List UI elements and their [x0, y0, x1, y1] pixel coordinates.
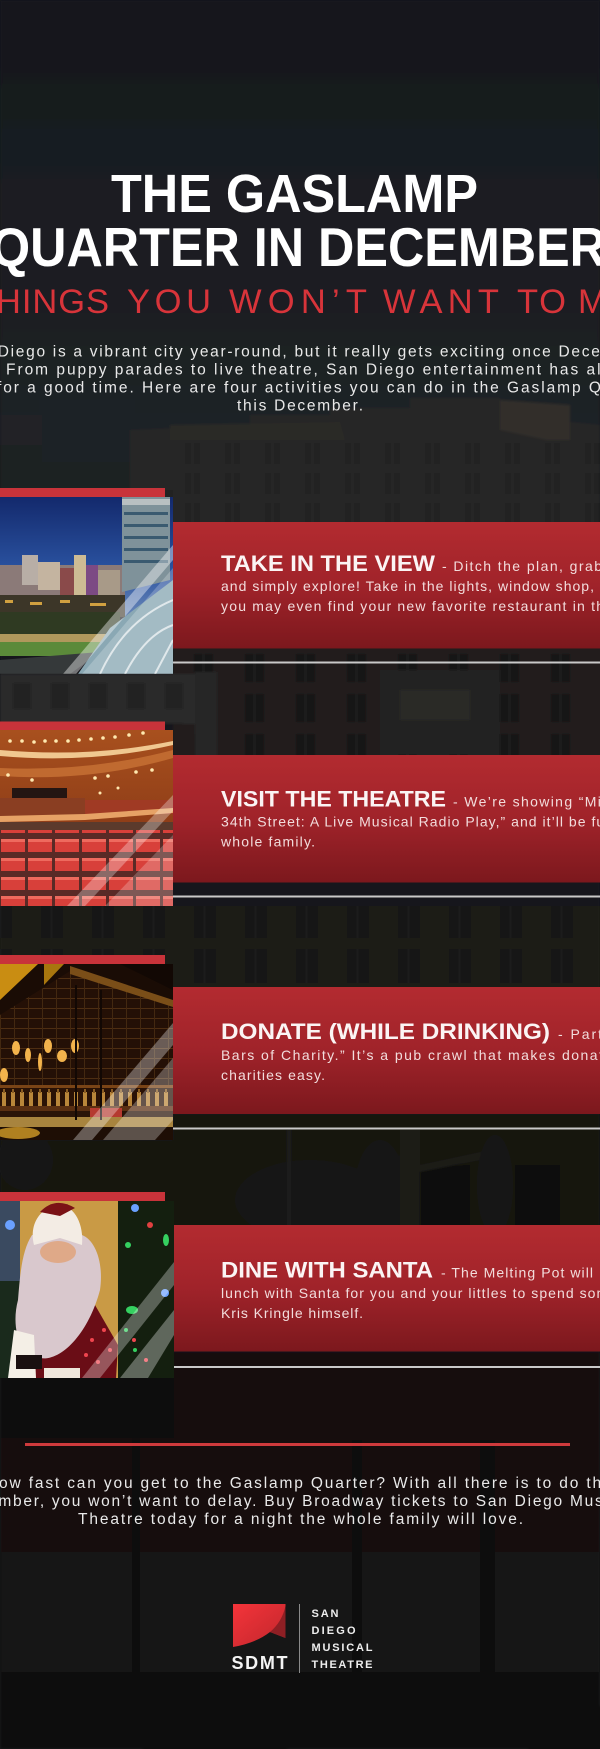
logo name: THEATRE [312, 1659, 372, 1671]
photo: theatre auditorium [0, 730, 173, 906]
description [220, 794, 600, 850]
red accent bar [0, 955, 165, 964]
logo name [312, 1608, 373, 1671]
rule [173, 896, 600, 898]
text band [173, 755, 600, 882]
icon: logo mark [233, 1604, 286, 1647]
item 3: donate while drinking [0, 955, 600, 1140]
photo: bar interior [0, 964, 173, 1140]
logo name: SAN [312, 1608, 339, 1620]
description: charities easy. [221, 1067, 325, 1083]
heading: VISIT THE THEATRE [221, 786, 446, 812]
red accent bar [0, 1192, 165, 1201]
intro paragraph [0, 344, 600, 414]
title [0, 164, 600, 278]
intro paragraph: From puppy parades to live theatre, San Diego entertainment has all [6, 362, 600, 378]
description: and simply explore! Take in the lights, window shop, [221, 578, 594, 594]
description: whole family. [220, 834, 315, 850]
logo: SDMT [232, 1604, 373, 1673]
text band [173, 987, 600, 1114]
heading: TAKE IN THE VIEW [221, 551, 435, 576]
heading: DONATE (WHILE DRINKING) [221, 1019, 550, 1044]
logo name: MUSICAL [312, 1642, 373, 1654]
description: Kris Kringle himself. [221, 1305, 363, 1321]
rule [173, 1128, 600, 1130]
description: - The Melting Pot will [441, 1264, 593, 1280]
subtitle: TO [517, 283, 566, 321]
rule [174, 1366, 600, 1368]
red accent bar [0, 488, 165, 497]
closing paragraph [0, 1475, 600, 1528]
title: THE GASLAMP [111, 164, 478, 224]
subtitle: WANT [383, 283, 499, 321]
subtitle: WON’T [229, 283, 367, 321]
red accent bar [0, 722, 165, 730]
logo divider [299, 1604, 300, 1673]
subtitle [0, 283, 600, 321]
description [221, 1026, 600, 1083]
red divider [25, 1443, 570, 1446]
closing paragraph: Theatre today for a night the whole family will love. [78, 1511, 523, 1528]
item 1: take in the view [0, 488, 600, 674]
logo wordmark: SDMT [232, 1653, 288, 1673]
rule [173, 662, 600, 664]
text band [174, 1225, 600, 1352]
subtitle: YOU [127, 283, 211, 321]
photo: santa claus [0, 1201, 174, 1378]
logo name: DIEGO [312, 1625, 356, 1637]
description [221, 1264, 600, 1321]
photo: city skyline [0, 497, 173, 674]
description [221, 558, 600, 614]
heading: DINE WITH SANTA [221, 1258, 433, 1282]
description: - Ditch the plan, grab [442, 558, 600, 574]
item 2: visit the theatre [0, 722, 600, 906]
text band [173, 522, 600, 648]
intro paragraph: this December. [237, 398, 363, 414]
item 4: dine with santa [0, 1192, 600, 1378]
